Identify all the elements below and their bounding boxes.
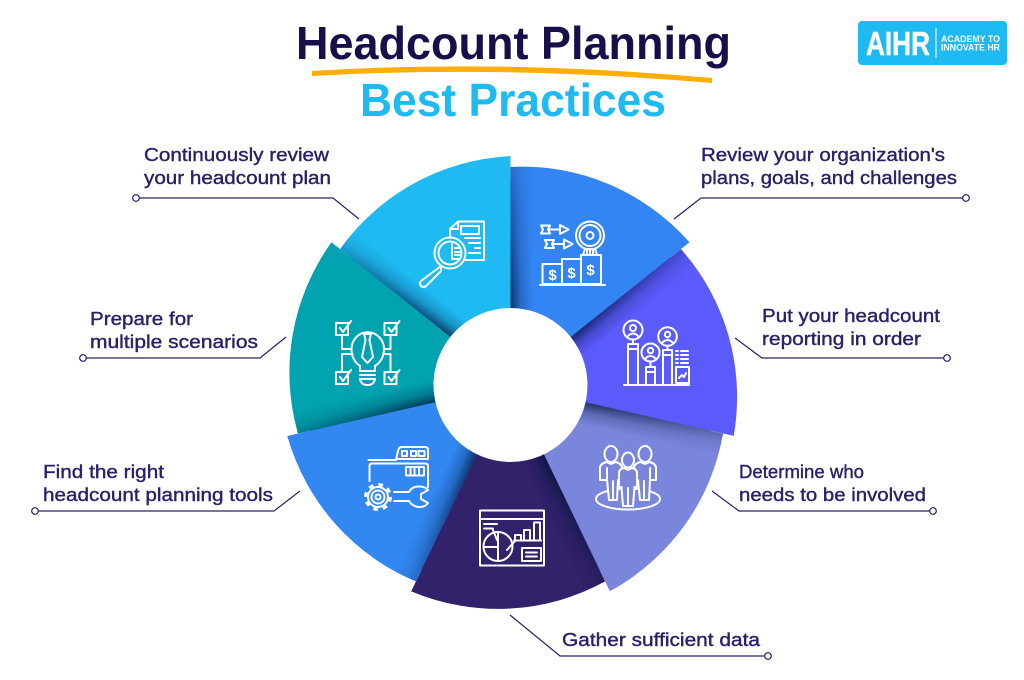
label: review organization plans: plans, goals, and challenges — [701, 167, 957, 188]
icon: dollar signs — [548, 262, 595, 284]
icon: document under magnifier — [420, 222, 484, 287]
icon: light bulb with tie and checkboxes — [336, 321, 400, 385]
segment: multiple scenarios — [289, 242, 450, 434]
icon: dollar signs: $ — [586, 262, 595, 279]
wheel chart — [287, 156, 738, 609]
label: gather data: Gather sufficient data — [562, 629, 761, 650]
segment: review organization plans — [510, 166, 690, 337]
label: who is involved — [712, 461, 936, 514]
title — [296, 17, 731, 126]
label: who is involved: needs to be involved — [739, 484, 926, 505]
icon: people on bar chart — [624, 320, 689, 385]
label: planning tools: headcount planning tools — [43, 484, 273, 505]
icon: dollar signs: $ — [548, 267, 557, 284]
label: continuously review — [133, 144, 359, 219]
segment: continuously review — [340, 156, 510, 337]
label: multiple scenarios — [80, 308, 286, 361]
label: gather data — [510, 615, 771, 659]
label: headcount reporting: reporting in order — [762, 328, 921, 349]
label: continuously review: Continuously review — [144, 144, 330, 165]
logo: AIHR: AIHR — [866, 25, 930, 62]
icon: group of people — [596, 446, 660, 510]
segment: planning tools — [287, 402, 478, 582]
icon: dollar signs: $ — [567, 265, 576, 282]
label: planning tools: Find the right — [43, 461, 164, 482]
label: who is involved: Determine who — [739, 461, 864, 482]
icon: data dashboard — [480, 510, 544, 566]
label: review organization plans — [674, 144, 969, 219]
icon: settings window with gear and wrench — [366, 447, 428, 509]
logo: AIHR: ACADEMY TO — [941, 34, 1000, 45]
label: headcount reporting: Put your headcount — [762, 305, 940, 326]
logo: AIHR: INNOVATE HR — [941, 42, 1000, 54]
title underline — [312, 66, 712, 83]
segment: headcount reporting — [571, 249, 738, 436]
logo: AIHR — [858, 21, 1007, 65]
subtitle: Best Practices — [360, 74, 666, 126]
label: multiple scenarios: multiple scenarios — [90, 331, 258, 352]
segment: who is involved — [544, 402, 723, 592]
label: review organization plans: Review your organization's — [701, 144, 945, 165]
label: headcount reporting — [735, 305, 950, 361]
label: continuously review: your headcount plan — [144, 167, 331, 188]
label: planning tools — [32, 461, 300, 514]
title: Headcount Planning — [296, 17, 731, 69]
icon: target and money steps — [540, 222, 605, 285]
center hole — [434, 308, 588, 462]
segment: gather data — [411, 454, 605, 609]
label: multiple scenarios: Prepare for — [90, 308, 193, 329]
